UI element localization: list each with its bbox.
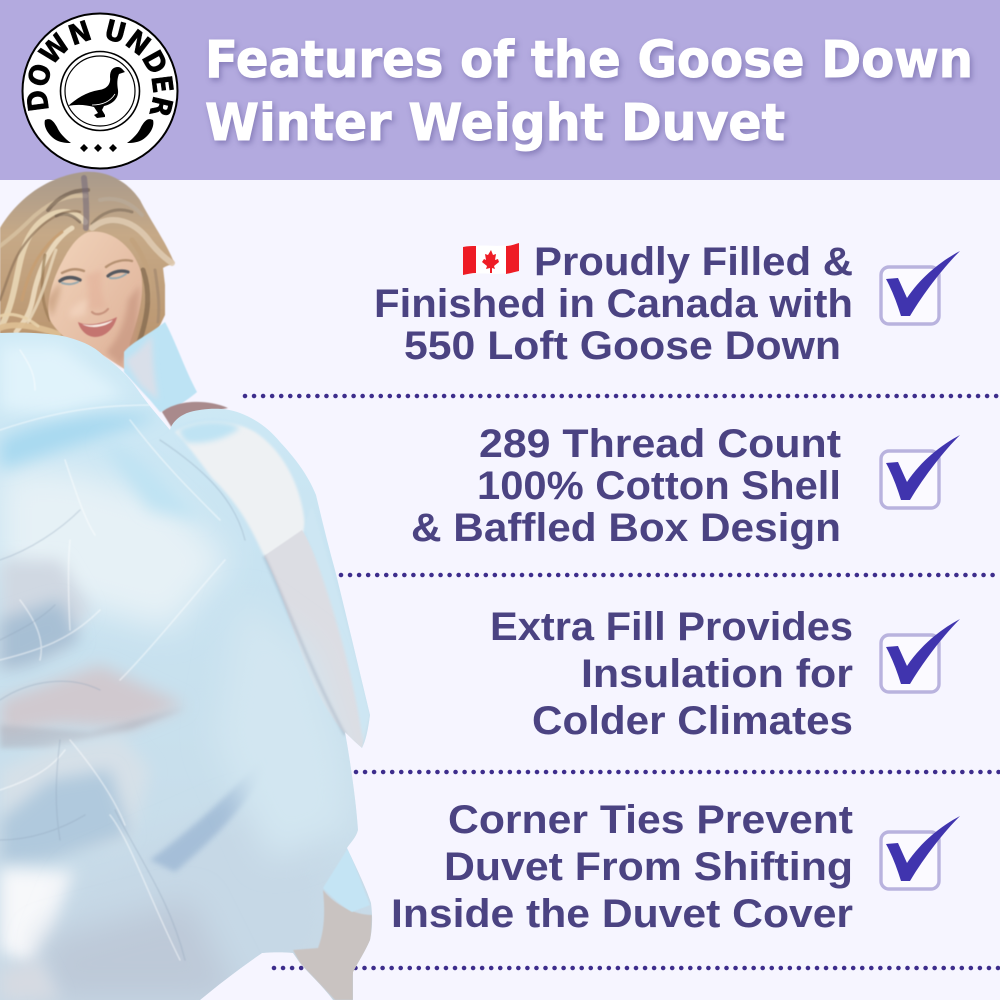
feature text: Corner Ties Prevent — [448, 798, 853, 842]
duvet back fold near shoulder — [124, 322, 197, 412]
photo: woman wrapped in duvet — [0, 172, 372, 1000]
title: Winter Weight Duvet — [205, 94, 785, 153]
duvet body — [0, 333, 372, 1000]
icon: checkbox — [881, 816, 960, 889]
feature text — [490, 605, 853, 743]
feature 2 — [411, 422, 960, 550]
feature text: Extra Fill Provides — [490, 605, 853, 649]
feature text: Duvet From Shifting — [444, 845, 853, 889]
feature text: 289 Thread Count — [479, 422, 841, 466]
feature text: Insulation for — [581, 652, 853, 696]
upper bright patches — [0, 345, 125, 415]
hair back — [0, 172, 174, 352]
icon: diamonds — [80, 144, 117, 152]
hand — [162, 402, 228, 428]
feature text: Colder Climates — [532, 699, 853, 743]
feature 3 — [490, 605, 960, 743]
icon: Canadian flag — [463, 243, 519, 275]
feature text — [411, 422, 841, 550]
title — [205, 31, 973, 153]
duvet shading — [0, 345, 372, 1000]
face shading — [46, 270, 140, 366]
feature 1 — [374, 240, 960, 368]
lower right flap — [293, 890, 372, 1000]
grey folds on the left — [0, 556, 87, 621]
right arm cream fold — [175, 421, 305, 556]
title: Features of the Goose Down — [205, 31, 973, 90]
dotted dividers — [245, 396, 1000, 968]
feature text — [374, 240, 853, 368]
icon: goose — [68, 67, 125, 118]
mouth — [78, 317, 117, 337]
hair strands — [0, 178, 172, 345]
feature text: & Baffled Box Design — [411, 506, 841, 550]
feature text: Proudly Filled & — [534, 240, 853, 284]
eyes and brows — [60, 260, 132, 314]
logo wordmark: DOWN UNDER — [27, 18, 174, 116]
hanging flap — [264, 530, 368, 748]
icon: checkbox — [881, 435, 960, 508]
body edge highlight — [264, 556, 345, 735]
icon: left feather — [45, 119, 71, 143]
feature text: 100% Cotton Shell — [477, 464, 841, 508]
wrinkles — [0, 350, 225, 960]
feature text: Inside the Duvet Cover — [391, 892, 853, 936]
logo: Down Under goose badge — [22, 12, 178, 170]
feature 4 — [391, 798, 960, 936]
icon: checkbox — [881, 251, 960, 324]
feature text — [391, 798, 853, 936]
header banner — [0, 0, 1000, 180]
feature text: 550 Loft Goose Down — [404, 324, 841, 368]
face — [48, 231, 142, 370]
feature text: Finished in Canada with — [374, 282, 853, 326]
icon: right feather — [127, 119, 153, 143]
icon: checkbox — [881, 619, 960, 692]
